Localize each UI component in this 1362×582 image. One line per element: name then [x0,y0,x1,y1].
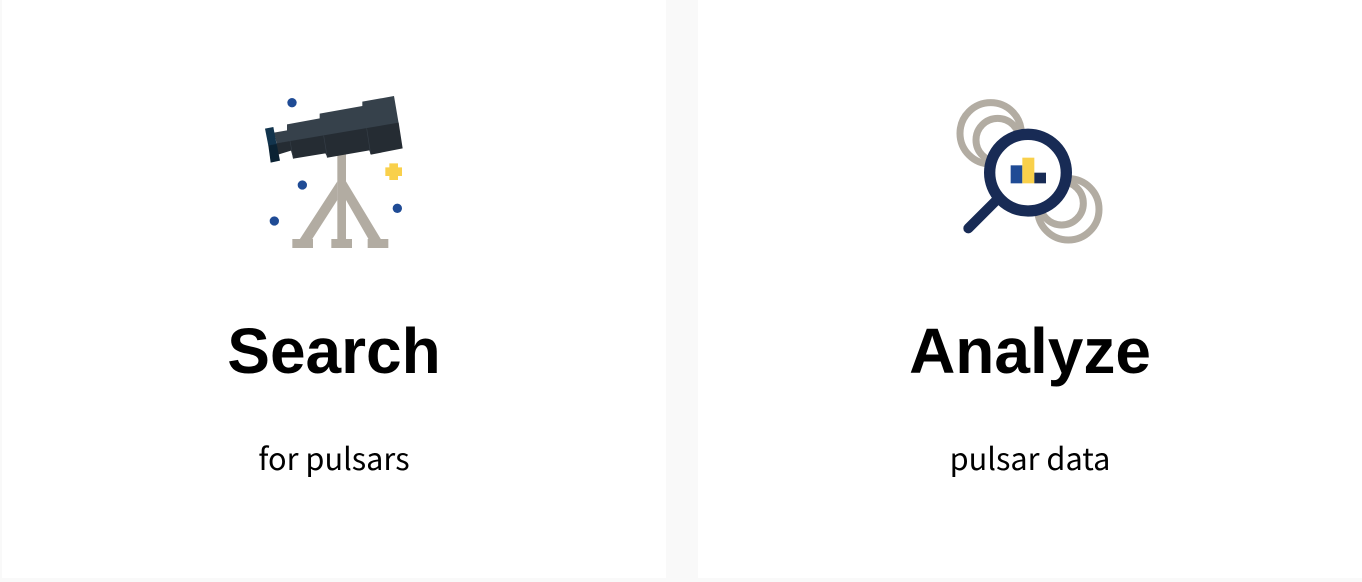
magnifier lens [990,134,1066,211]
icon: telescope [265,96,403,248]
yellow star [385,163,402,180]
icon: magnifier over pulsar [956,99,1102,244]
panel: search [2,0,666,578]
pulsar rings [960,103,1099,240]
subtitle: pulsar data: pulsar data [950,434,1110,479]
panel: analyze [698,0,1362,578]
heading: Analyze: Analyze [909,315,1151,387]
tripod [292,153,388,248]
stars [270,98,402,226]
bar chart [1011,158,1046,183]
telescope tube [274,96,399,144]
heading: Search: Search [227,315,441,387]
tube segment seams [290,128,371,159]
eyepiece [265,127,277,146]
subtitle: for pulsars: for pulsars [258,434,410,479]
magnifier handle [968,200,997,228]
